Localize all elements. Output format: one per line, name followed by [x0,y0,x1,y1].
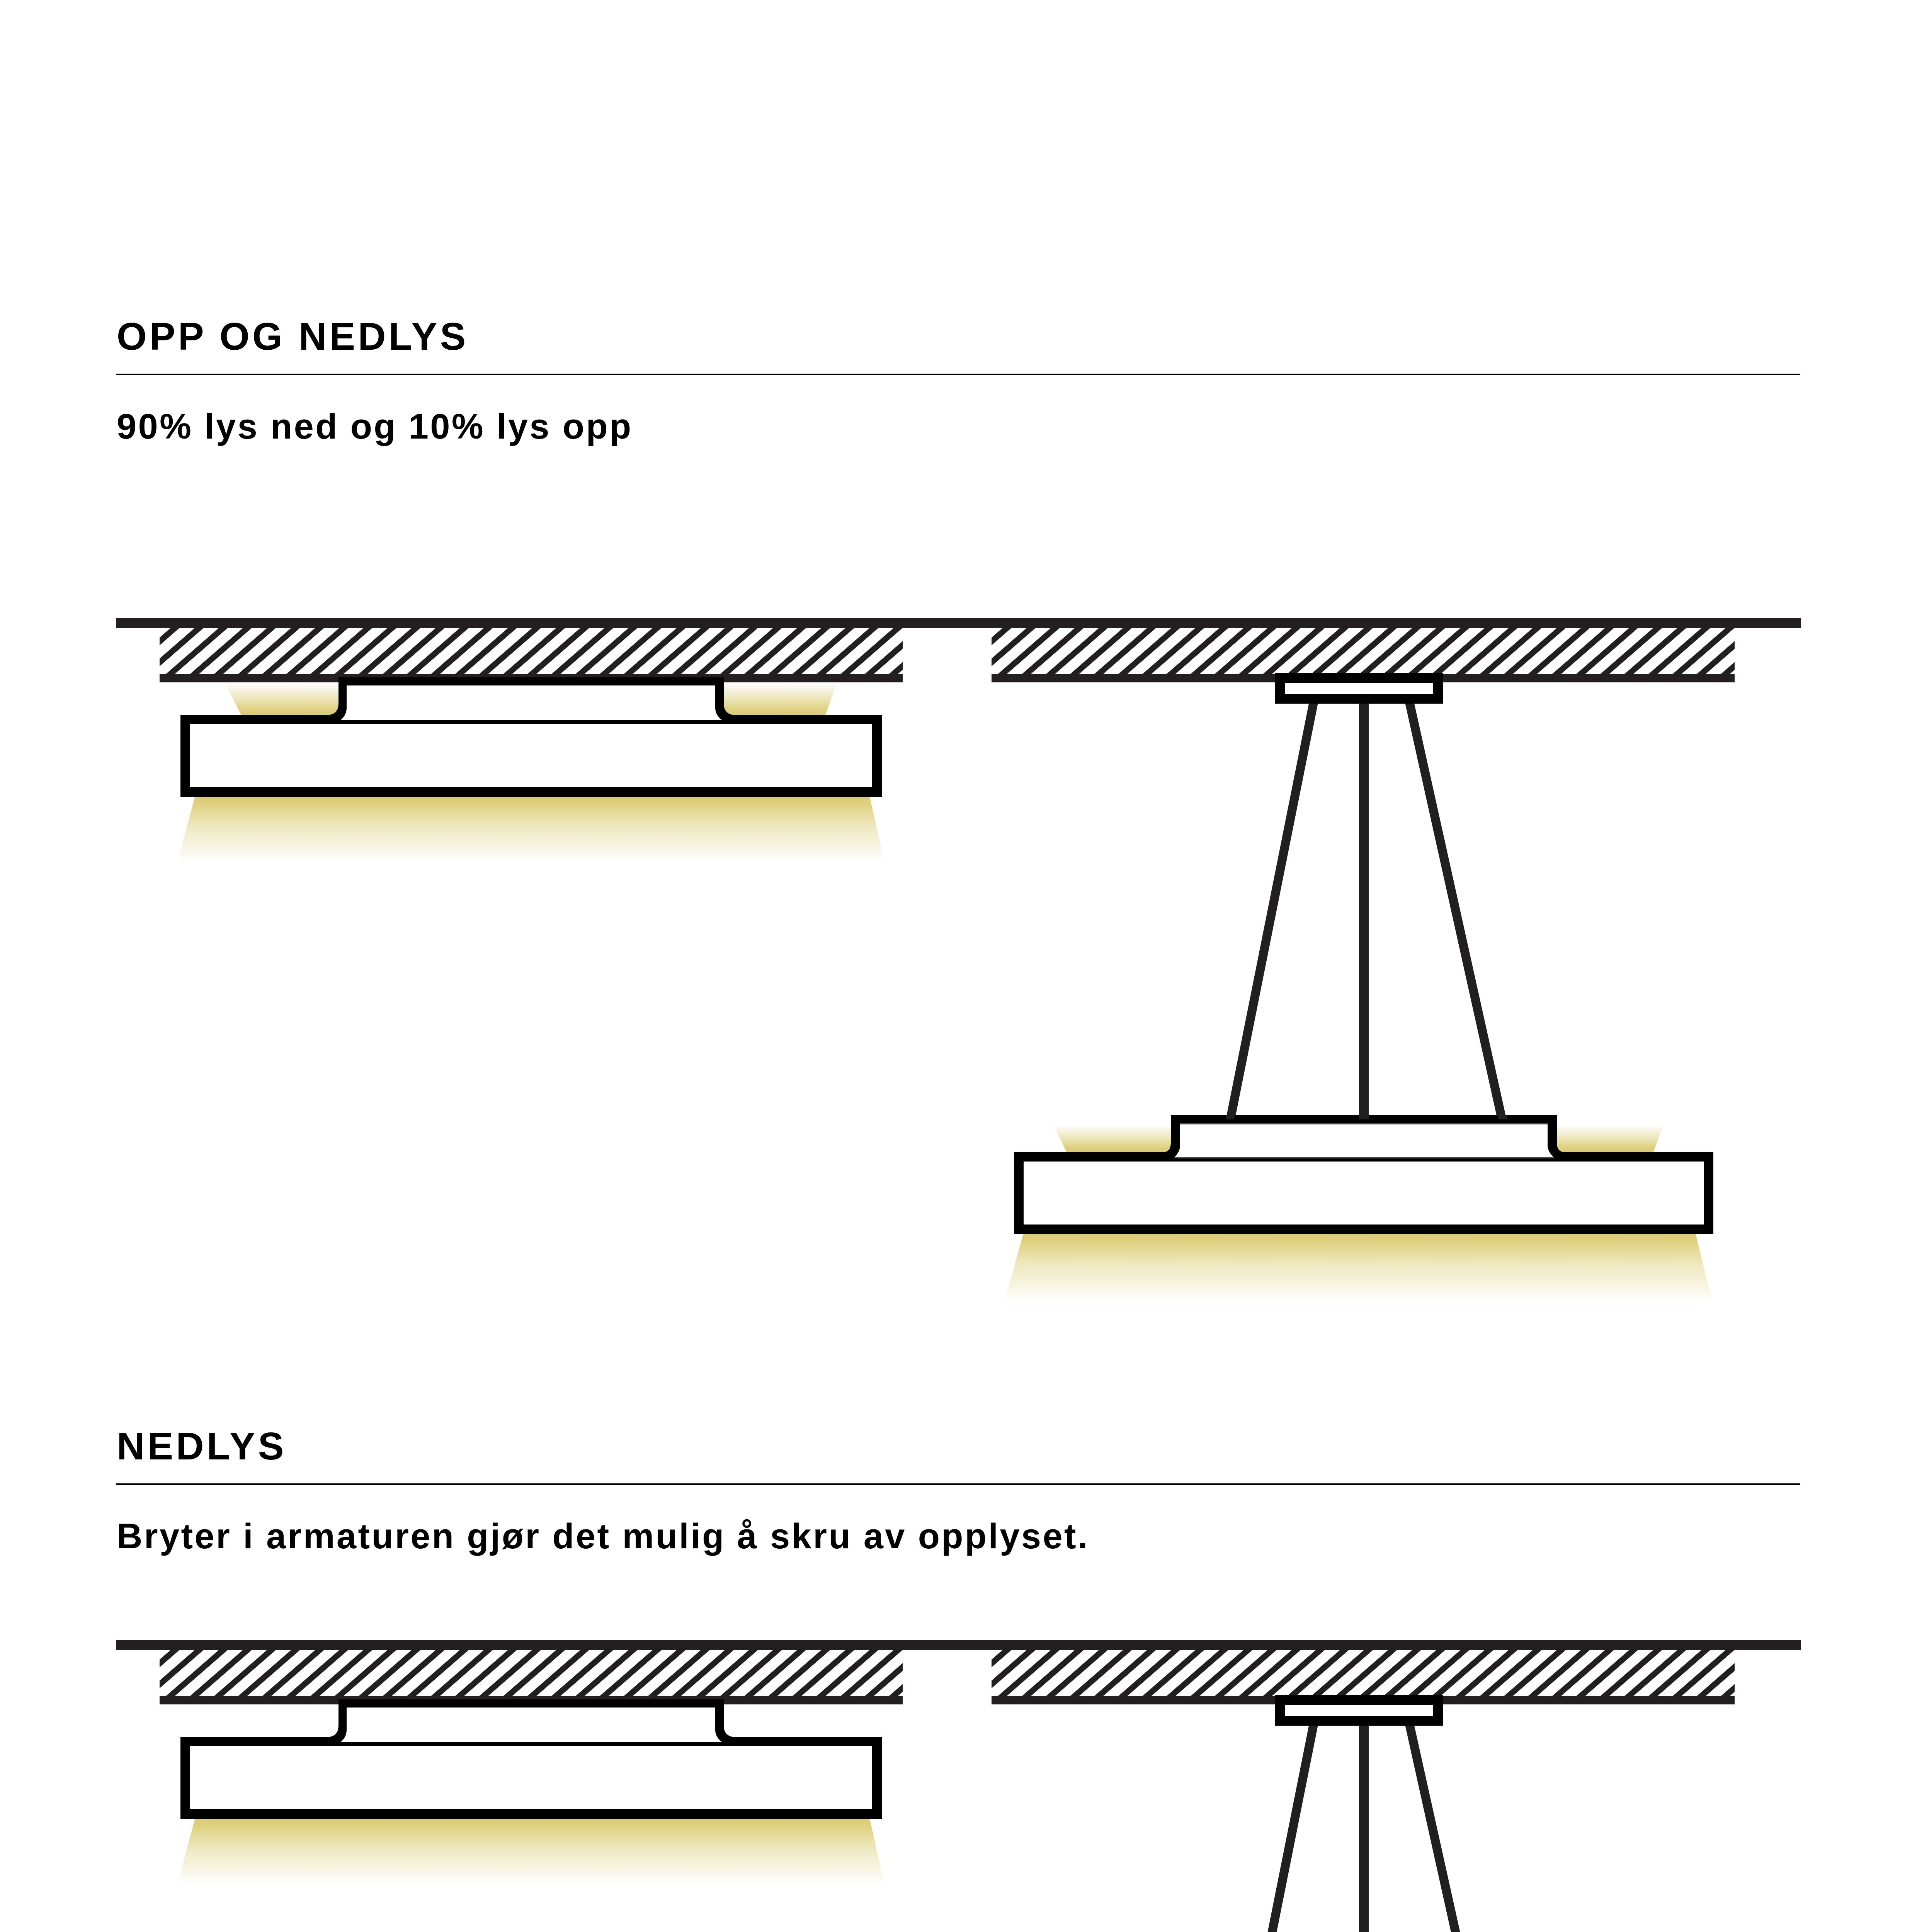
light: upward beams, surface fixture [225,683,837,715]
heading: opp og nedlys: OPP OG NEDLYS [117,315,469,358]
section: nedlys [92,1425,1830,1932]
fixture: surface-mounted luminaire [180,1699,882,1819]
heading rule [116,374,1800,375]
heading: nedlys: NEDLYS [117,1425,287,1468]
ceiling line [116,1640,1801,1650]
light: upward beams, pendant fixture [1053,1124,1664,1152]
fixture: surface-mounted luminaire [180,677,882,797]
ceiling hatch: pendant [924,1647,1830,1704]
ceiling hatch: surface-mounted [92,1647,998,1704]
light: downward beams [177,1819,1713,1932]
fixture: pendant luminaire [1014,1695,1713,1932]
ceiling hatch: surface-mounted [92,625,998,682]
subheading: 90% down, 10% up: 90% lys ned og 10% lys opp [117,407,633,446]
light: downward beams [177,797,1713,1302]
ceiling hatch: pendant [924,625,1830,682]
fixture: pendant luminaire [1014,673,1713,1234]
heading rule [116,1483,1800,1485]
section: opp og nedlys [92,315,1830,1302]
subheading: switch note: Bryter i armaturen gjør det mulig å skru av opplyset. [117,1517,1089,1556]
ceiling line [116,618,1801,628]
